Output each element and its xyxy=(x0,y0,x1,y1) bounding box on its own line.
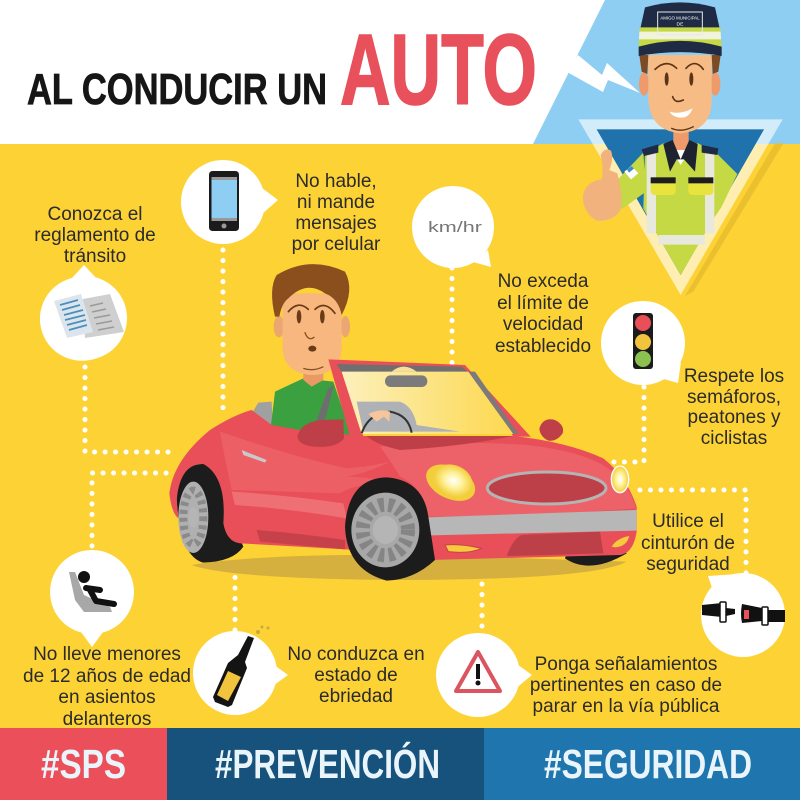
text: menores: delanteros xyxy=(63,709,151,730)
text: menores: de 12 años de edad xyxy=(23,666,191,687)
text: ebriedad: No conduzca en xyxy=(287,644,425,665)
front wheel xyxy=(345,477,435,581)
text: señalamientos: parar en la vía pública xyxy=(533,696,720,717)
panel: conozca el reglamento xyxy=(34,204,156,361)
text: cinturón: cinturón de xyxy=(641,533,735,554)
icon: km/hr bubble xyxy=(412,186,494,268)
officer head xyxy=(639,55,721,133)
panel: cinturón xyxy=(641,511,785,657)
hashtag footer bar: #PREVENCIÓN xyxy=(215,741,440,787)
panel: velocidad xyxy=(412,186,591,357)
driver xyxy=(247,264,352,437)
text: reglamento: tránsito xyxy=(64,246,126,267)
traffic officer illustration xyxy=(578,2,783,296)
text: velocidad: No exceda xyxy=(498,271,589,292)
title xyxy=(27,14,537,126)
text: ebriedad: estado de xyxy=(314,665,398,686)
hashtag footer bar: #SPS xyxy=(41,741,126,787)
text: celular: ni mande xyxy=(297,192,375,213)
text: velocidad: velocidad xyxy=(503,314,583,335)
officer cap: DE xyxy=(677,21,684,27)
convertible car with driver xyxy=(169,264,637,581)
icon: bottle bubble xyxy=(193,626,288,715)
car body xyxy=(169,410,637,560)
text: velocidad: establecido xyxy=(495,336,591,357)
officer cap: AMIGO MUNICIPAL xyxy=(660,15,700,21)
text: señalamientos: Ponga señalamientos xyxy=(535,654,717,675)
text: menores: No lleve menores xyxy=(33,644,181,665)
text: semáforos: Respete los xyxy=(684,366,784,387)
front right tyre xyxy=(565,543,627,566)
headlights xyxy=(420,457,629,508)
icon: child seat bubble xyxy=(50,550,134,647)
text: reglamento: Conozca el xyxy=(47,204,143,225)
hashtag footer bar xyxy=(0,728,800,800)
officer cap xyxy=(639,2,722,56)
panel: menores xyxy=(23,550,191,730)
title: AL CONDUCIR UN xyxy=(27,65,327,114)
text: celular: mensajes xyxy=(295,213,377,234)
text: semáforos: peatones y xyxy=(688,407,781,428)
text: menores: en asientos xyxy=(58,687,156,708)
icon: traffic light bubble xyxy=(601,301,685,385)
text: celular: por celular xyxy=(292,234,381,255)
dotted connector lines xyxy=(85,250,746,632)
text: cinturón: Utilice el xyxy=(652,511,724,532)
panel: señalamientos xyxy=(436,633,722,717)
text: semáforos: semáforos, xyxy=(687,387,781,408)
shadow xyxy=(192,555,627,580)
text: velocidad: el límite de xyxy=(497,293,589,314)
text: señalamientos: pertinentes en caso de xyxy=(530,675,722,696)
text: semáforos: ciclistas xyxy=(701,428,767,449)
icon: documents bubble xyxy=(40,265,127,361)
icon: phone bubble xyxy=(181,160,278,244)
text: reglamento: reglamento de xyxy=(34,225,156,246)
thumbs-up hand xyxy=(583,149,621,221)
icon: seat belt bubble xyxy=(701,573,785,657)
grille xyxy=(487,472,606,504)
text: cinturón: seguridad xyxy=(646,554,730,575)
icon: warning triangle bubble xyxy=(436,633,532,717)
text: celular: No hable, xyxy=(295,171,377,192)
panel: no hable por celular xyxy=(181,160,381,255)
rear wheel xyxy=(177,464,243,563)
windshield xyxy=(328,359,531,437)
side mirrors xyxy=(297,419,563,447)
hood highlight xyxy=(380,443,636,517)
icon: km/hr bubble: km/hr xyxy=(428,219,482,236)
dashboard shadow xyxy=(367,436,513,450)
text: ebriedad: ebriedad xyxy=(319,686,393,707)
title: AUTO xyxy=(340,14,537,126)
bumper xyxy=(427,510,637,556)
panel: ebriedad xyxy=(193,626,425,715)
panel: semáforos xyxy=(601,301,784,449)
